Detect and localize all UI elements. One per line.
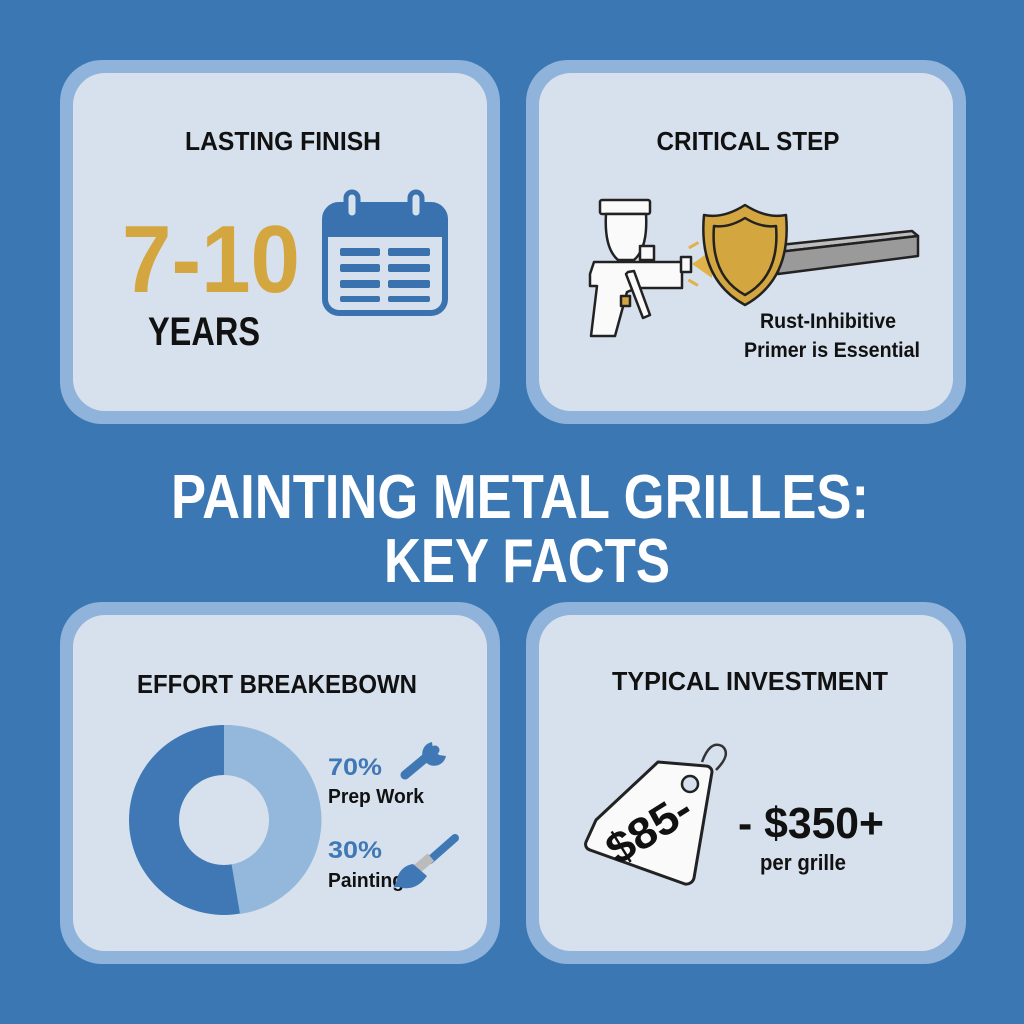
legend: painting [328, 837, 455, 892]
icon: spray gun [590, 200, 691, 336]
heading: effort breakdown: EFFORT BREAKEBOWN [137, 669, 417, 699]
text: per grille: per grille [760, 850, 846, 875]
icon: price tag: $85- [597, 784, 701, 874]
icon: shield [703, 205, 787, 305]
text: years: YEARS [148, 310, 260, 354]
text: primer note: Rust-Inhibitive [760, 310, 896, 333]
legend: prep work [328, 742, 446, 808]
heading: critical step: CRITICAL STEP [656, 126, 840, 156]
legend: prep work: 70% [328, 754, 382, 781]
panel: critical step [526, 60, 966, 424]
text: price range: - $350+ [738, 799, 884, 848]
icon: price tag [586, 745, 726, 884]
panel: lasting finish [60, 60, 500, 424]
panel: effort breakdown [60, 602, 500, 964]
icon: calendar [325, 192, 445, 313]
icon: metal bar [770, 231, 918, 274]
number: 7-10: 7-10 [122, 206, 300, 313]
legend: painting: Painting [328, 870, 404, 892]
icon: brush [393, 838, 455, 888]
icon: spray [688, 241, 712, 287]
text: primer note: Primer is Essential [744, 339, 920, 362]
text: primer note [744, 310, 920, 362]
icon: wrench [405, 742, 446, 775]
heading: lasting finish: LASTING FINISH [185, 126, 381, 156]
heading: typical investment: TYPICAL INVESTMENT [612, 666, 888, 696]
title: PAINTING METAL GRILLES: [171, 463, 869, 532]
chart: donut [129, 725, 321, 915]
title: KEY FACTS [384, 527, 670, 596]
legend: painting: 30% [328, 837, 382, 864]
legend: prep work: Prep Work [328, 786, 425, 808]
panel: typical investment [526, 602, 966, 964]
title [171, 463, 869, 596]
